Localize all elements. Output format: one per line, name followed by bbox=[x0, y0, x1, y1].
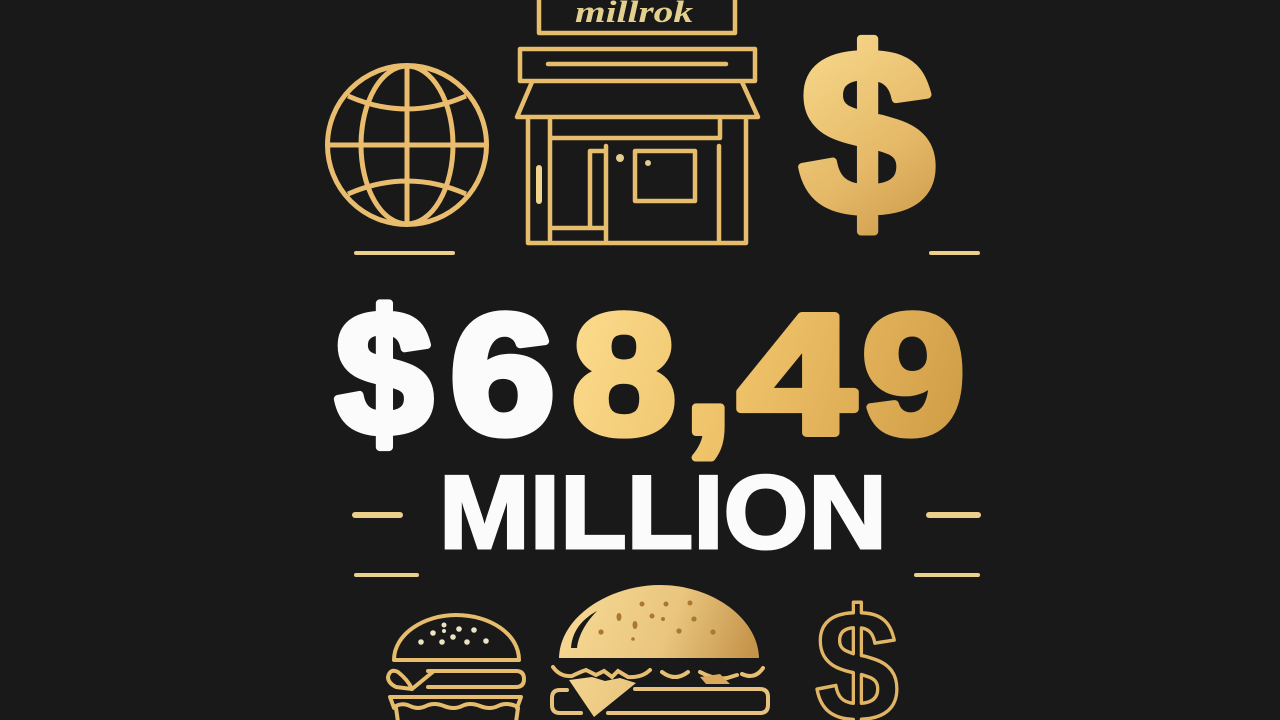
bun bbox=[559, 585, 759, 658]
white digits bbox=[336, 276, 555, 472]
gold digits: 4 bbox=[738, 280, 855, 470]
seeds bbox=[598, 600, 716, 641]
icon: storefront bbox=[517, 0, 758, 243]
sesame seeds bbox=[418, 622, 489, 645]
divider lines bottom bbox=[356, 573, 978, 577]
lettuce bbox=[553, 667, 763, 678]
icon: filled burger bbox=[552, 585, 768, 717]
icon: globe bbox=[328, 66, 486, 224]
MILLION label: MILLION bbox=[439, 455, 887, 571]
patty bbox=[552, 689, 768, 713]
white digits: 6 bbox=[450, 280, 555, 470]
shop awning bbox=[517, 82, 758, 117]
white digits: $ bbox=[336, 276, 432, 472]
headline figure bbox=[336, 276, 965, 472]
icon: large gold dollar: $ bbox=[799, 1, 935, 265]
gold digits: , bbox=[684, 283, 732, 467]
shop sign bbox=[539, 0, 735, 33]
dashes beside MILLION bbox=[355, 512, 978, 518]
gold digits: 8 bbox=[572, 280, 676, 470]
gold digits bbox=[572, 280, 965, 470]
gold digits: 9 bbox=[862, 280, 965, 470]
shop band bbox=[520, 49, 755, 81]
icon: outline burger bbox=[388, 615, 524, 720]
divider lines top bbox=[356, 251, 978, 255]
shop walls and door bbox=[528, 118, 746, 243]
cheese bbox=[569, 677, 636, 717]
